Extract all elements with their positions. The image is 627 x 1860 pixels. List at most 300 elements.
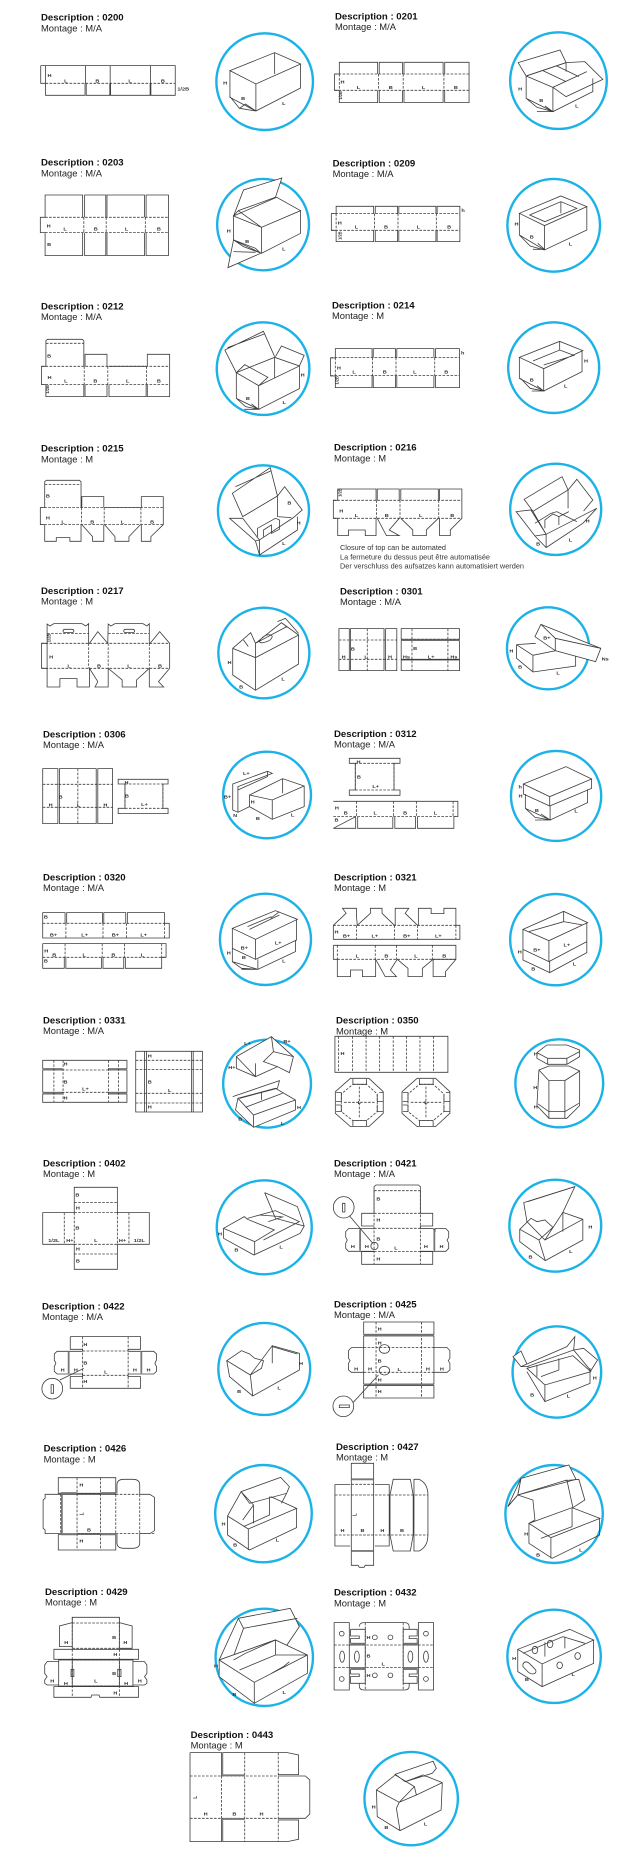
flat pattern 0312: H — [335, 806, 339, 811]
icon: circle box 0429: L — [283, 1690, 286, 1696]
flat pattern 0209 — [331, 206, 465, 242]
flat pattern 0306: H — [49, 803, 53, 808]
heading 0426: Montage : M — [44, 1453, 96, 1464]
icon: circle box 0214 — [508, 322, 599, 413]
icon: circle box 0217: H — [228, 660, 232, 666]
heading 0422: Montage : M/A — [42, 1311, 104, 1322]
flat pattern 0402: B — [75, 1226, 80, 1231]
flat pattern 0425: L — [397, 1367, 401, 1373]
heading 0201 — [335, 11, 418, 32]
flat pattern 0320: L — [83, 953, 86, 958]
icon: circle box 0421: H — [588, 1225, 593, 1230]
panel: box 0321 — [333, 872, 601, 985]
panel: box 0312 — [333, 729, 601, 841]
flat pattern 0217 — [42, 624, 170, 687]
heading 0443: Description : 0443 — [191, 1730, 273, 1741]
flat pattern 0209: 1/2B — [337, 231, 342, 240]
flat pattern 0209: h — [461, 208, 465, 214]
flat pattern 0350: L — [358, 1100, 361, 1106]
icon: circle box 0331: B+ — [283, 1039, 291, 1045]
flat pattern 0216: L — [355, 513, 358, 519]
icon: circle box 0429 — [214, 1608, 313, 1706]
heading 0306: Montage : M/A — [43, 739, 105, 750]
icon: circle box 0350: H — [534, 1052, 538, 1057]
heading 0217 — [41, 586, 124, 607]
flat pattern 0214: 1/2B — [334, 376, 340, 385]
icon: circle box 0425: H — [593, 1376, 597, 1381]
icon: circle box 0443: B — [384, 1825, 389, 1831]
flat pattern 0350: H — [341, 1051, 345, 1057]
flat pattern 0212 — [42, 339, 170, 397]
icon: circle box 0443 — [364, 1752, 458, 1845]
heading 0443: Montage : M — [191, 1740, 243, 1751]
flat pattern 0201: B — [454, 85, 458, 91]
flat pattern 0209: L — [417, 225, 420, 230]
flat pattern 0320: B — [111, 953, 116, 958]
heading 0212: Description : 0212 — [41, 301, 124, 312]
heading 0203: Description : 0203 — [41, 158, 124, 169]
flat pattern 0429: H — [138, 1679, 142, 1684]
heading 0203 — [41, 158, 124, 178]
flat pattern 0421: H — [365, 1244, 369, 1250]
icon: circle box 0215 — [218, 465, 309, 556]
icon: circle box 0306: N — [233, 813, 237, 819]
flat pattern 0200: B — [95, 79, 100, 84]
flat pattern 0426: H — [79, 1483, 84, 1488]
flat pattern 0203: H — [47, 224, 51, 229]
flat pattern 0209: L — [355, 225, 358, 230]
flat pattern 0215: H — [46, 516, 50, 521]
heading 0200: Description : 0200 — [41, 13, 124, 24]
icon: circle box 0432: L — [572, 1672, 575, 1678]
icon: circle box 0312: B — [535, 808, 539, 814]
panel: box 0201 — [335, 11, 607, 129]
flat pattern 0421: L — [394, 1246, 398, 1251]
flat pattern 0312: B — [357, 775, 361, 780]
panel: box 0212 — [41, 301, 309, 415]
flat pattern 0443: L — [192, 1796, 199, 1799]
icon: circle box 0321: B — [531, 967, 536, 972]
flat pattern 0203: L — [63, 227, 67, 232]
flat pattern 0320: B+ — [112, 933, 119, 938]
panel: box 0422 — [42, 1301, 310, 1415]
icon: circle box 0212: B — [246, 396, 250, 402]
flat pattern 0200: L — [128, 79, 132, 84]
flat pattern 0402: B — [76, 1259, 80, 1264]
heading 0214 — [332, 300, 415, 321]
heading 0200: Montage : M/A — [41, 22, 103, 33]
heading 0214: Montage : M — [332, 310, 384, 321]
icon: circle box 0200: L — [282, 101, 286, 107]
icon: circle box 0203 — [217, 178, 309, 270]
flat pattern 0320: B — [44, 915, 48, 920]
flat pattern 0427: B — [400, 1528, 404, 1534]
flat pattern 0421: H — [376, 1257, 381, 1262]
icon: circle box 0312: L — [574, 809, 578, 814]
heading 0421: Montage : M/A — [334, 1168, 396, 1179]
panel: box 0215 — [40, 444, 309, 556]
flat pattern 0212: B — [47, 354, 51, 359]
heading 0201: Montage : M/A — [335, 21, 397, 32]
heading 0306: Description : 0306 — [43, 729, 126, 740]
flat pattern 0422: H — [83, 1342, 88, 1348]
flat pattern 0217: L — [127, 664, 131, 669]
flat pattern 0301: Hs — [403, 655, 410, 660]
flat pattern 0443: B — [232, 1812, 237, 1817]
icon: circle box 0331: H+ — [228, 1065, 236, 1071]
flat pattern 0425: H — [378, 1389, 382, 1395]
flat pattern 0301: L — [364, 655, 368, 660]
heading 0432: Description : 0432 — [334, 1588, 417, 1599]
flat pattern 0201: H — [341, 80, 345, 85]
icon: circle box 0331: B — [238, 1117, 243, 1122]
icon: circle box 0306: L — [291, 813, 294, 818]
flat pattern 0321: B — [442, 954, 447, 959]
flat pattern 0432: H — [366, 1673, 371, 1679]
panel: box 0426 — [43, 1444, 312, 1562]
flat pattern 0321: H — [335, 930, 339, 935]
flat pattern 0321: L+ — [435, 934, 442, 939]
flat pattern 0306: H — [125, 780, 129, 786]
flat pattern 0432: B — [366, 1654, 371, 1659]
flat pattern 0312: L — [374, 811, 377, 816]
flat pattern 0321 — [333, 908, 460, 977]
panel: box 0301 — [339, 586, 609, 689]
panel: box 0320 — [43, 872, 311, 985]
flat pattern 0425: H — [354, 1367, 358, 1372]
flat pattern 0212: B — [157, 379, 161, 384]
heading 0432 — [334, 1588, 417, 1608]
icon: circle box 0426: H — [222, 1522, 226, 1527]
icon: circle box 0200 — [216, 33, 313, 130]
flat pattern 0402: H+ — [119, 1238, 126, 1244]
flat pattern 0443: H — [204, 1812, 208, 1817]
icon: circle box 0443: L — [424, 1822, 427, 1827]
icon: circle box 0200: H — [223, 81, 227, 86]
flat pattern 0215: B — [46, 494, 50, 499]
icon: circle box 0320: B+ — [241, 946, 248, 951]
heading 0331: Description : 0331 — [43, 1015, 126, 1026]
panel: box 0203 — [40, 158, 309, 270]
flat pattern 0425: H — [378, 1378, 382, 1383]
panel: box 0209 — [331, 158, 600, 272]
heading 0217: Description : 0217 — [41, 586, 124, 597]
heading 0425 — [334, 1299, 417, 1320]
icon: circle box 0301: Ns — [602, 657, 609, 662]
panel: box 0200 — [41, 13, 313, 130]
note: automation text 0216: Der verschluss des aufsatzes kann automatisiert werden — [340, 562, 524, 570]
panel: box 0331 — [43, 1015, 311, 1128]
icon: circle box 0301: L — [556, 671, 560, 676]
flat pattern 0425: H — [426, 1367, 430, 1372]
heading 0301: Description : 0301 — [340, 586, 423, 597]
heading 0427: Description : 0427 — [336, 1442, 419, 1453]
panel: box 0217 — [41, 586, 309, 698]
icon: circle box 0306: B+ — [224, 795, 231, 800]
icon: circle box 0217: B — [239, 685, 243, 690]
flat pattern 0212: B — [93, 379, 98, 384]
flat pattern 0203: B — [157, 227, 161, 232]
icon: circle box 0426: B — [233, 1543, 237, 1548]
icon: circle box 0201: B — [539, 98, 544, 104]
panel: box 0214 — [331, 300, 599, 413]
icon: circle box 0427 — [505, 1465, 603, 1563]
flat pattern 0429: H — [64, 1640, 69, 1646]
heading 0425: Montage : M/A — [334, 1309, 396, 1320]
panel: box 0443 — [190, 1730, 458, 1845]
icon: circle box 0331: L+ — [244, 1041, 251, 1047]
flat pattern 0216: H — [339, 509, 344, 514]
heading 0312 — [334, 729, 417, 750]
flat pattern 0427: L — [352, 1513, 359, 1516]
heading 0203: Montage : M/A — [41, 167, 103, 178]
icon: circle box 0320 — [220, 894, 311, 985]
flat pattern 0321: L — [356, 954, 359, 959]
flat pattern 0321: L — [414, 954, 418, 959]
flat pattern 0301: B — [351, 647, 355, 652]
heading 0421 — [334, 1158, 417, 1179]
icon: circle box 0216: B — [536, 542, 540, 547]
flat pattern 0312 — [333, 758, 458, 828]
flat pattern 0421 — [333, 1185, 449, 1264]
heading 0429: Description : 0429 — [45, 1587, 128, 1598]
icon: circle box 0203: H — [227, 229, 231, 234]
heading 0331 — [43, 1015, 126, 1036]
flat pattern 0425: H — [378, 1327, 382, 1332]
icon: circle box 0331: L — [281, 1121, 284, 1127]
flat pattern 0301 — [339, 629, 459, 671]
flat pattern 0402: 1/2L — [134, 1238, 145, 1244]
icon: circle box 0212: H — [301, 373, 305, 378]
icon: circle box 0301 — [507, 607, 609, 689]
flat pattern 0214: L — [352, 370, 356, 375]
flat pattern 0203: L — [125, 227, 128, 232]
flat pattern 0209: B — [384, 225, 388, 230]
heading 0306 — [43, 729, 126, 750]
icon: circle box 0429: H — [214, 1664, 218, 1669]
icon: circle box 0301: B+ — [543, 636, 551, 641]
icon: circle box 0312: H — [519, 794, 523, 799]
flat pattern 0214: L — [413, 370, 416, 375]
icon: circle box 0214: L — [564, 384, 567, 389]
icon: circle box 0321 — [510, 894, 601, 985]
flat pattern 0312: B — [403, 811, 408, 816]
note: automation text 0216 — [340, 543, 524, 570]
flat pattern 0301: B — [413, 646, 418, 652]
icon: circle box 0215: L — [282, 541, 286, 547]
flat pattern 0201: B — [389, 85, 393, 91]
icon: circle box 0421 — [509, 1180, 601, 1272]
flat pattern 0422 — [42, 1337, 156, 1399]
flat pattern 0306: B — [125, 794, 129, 799]
flat pattern 0402: L — [94, 1238, 98, 1244]
icon: circle box 0209: L — [569, 242, 572, 247]
flat pattern 0301: H — [342, 655, 346, 660]
icon: circle box 0427: L — [579, 1548, 583, 1553]
flat pattern 0429: H — [124, 1681, 128, 1687]
heading 0209: Description : 0209 — [333, 158, 415, 169]
flat pattern 0426 — [43, 1478, 154, 1550]
flat pattern 0421: H — [376, 1218, 381, 1223]
heading 0212: Montage : M/A — [41, 311, 103, 322]
flat pattern 0212: 1/2B — [45, 385, 50, 394]
heading 0301: Montage : M/A — [340, 596, 402, 607]
icon: circle box 0427: B — [536, 1553, 540, 1558]
flat pattern 0212: H — [47, 375, 52, 381]
flat pattern 0427: B — [360, 1528, 365, 1534]
flat pattern 0214: H — [337, 366, 341, 371]
heading 0350 — [336, 1016, 419, 1036]
icon: circle box 0320: H — [227, 951, 231, 956]
flat pattern 0429 — [45, 1617, 147, 1697]
flat pattern 0201: L — [422, 85, 425, 91]
flat pattern 0214: B — [444, 370, 449, 375]
icon: circle box 0402 — [217, 1180, 312, 1274]
heading 0216 — [334, 443, 417, 463]
heading 0426 — [44, 1444, 126, 1464]
flat pattern 0429: B — [112, 1635, 117, 1641]
flat pattern 0217: B — [158, 664, 162, 669]
icon: circle box 0201 — [510, 32, 607, 129]
icon: circle box 0422: H — [299, 1361, 303, 1367]
flat pattern 0321: B+ — [343, 934, 350, 939]
flat pattern 0306 — [43, 769, 168, 824]
icon: circle box 0312: h — [518, 785, 522, 790]
flat pattern 0429: B — [112, 1671, 117, 1677]
flat pattern 0209: H — [338, 221, 342, 226]
flat pattern 0215 — [40, 480, 163, 541]
icon: circle box 0429: B — [232, 1692, 237, 1698]
icon: circle box 0306: H — [251, 800, 255, 805]
heading 0426: Description : 0426 — [44, 1444, 126, 1455]
icon: circle box 0214: H — [584, 359, 588, 364]
flat pattern 0429: L — [94, 1679, 98, 1684]
flat pattern 0425: B — [378, 1359, 382, 1364]
flat pattern 0422: H — [61, 1368, 65, 1373]
icon: circle box 0203: L — [282, 247, 286, 252]
icon: circle box 0306 — [223, 752, 311, 838]
flat pattern 0321: B+ — [403, 934, 410, 939]
icon: circle box 0350 — [515, 1039, 603, 1127]
flat pattern 0427 — [335, 1463, 428, 1567]
icon: circle box 0402: L — [279, 1245, 283, 1250]
heading 0321 — [334, 872, 417, 893]
icon: circle box 0402: H — [218, 1232, 222, 1237]
heading 0421: Description : 0421 — [334, 1158, 417, 1169]
flat pattern 0216: B — [450, 513, 455, 519]
flat pattern 0320: L — [141, 953, 144, 958]
icon: circle box 0217 — [218, 608, 309, 698]
flat pattern 0429: H — [50, 1679, 55, 1684]
icon: circle box 0306: B — [256, 816, 260, 822]
icon: circle box 0421: L — [569, 1249, 573, 1255]
flat pattern 0422: H — [133, 1368, 137, 1373]
heading 0214: Description : 0214 — [332, 300, 415, 311]
flat pattern 0306: B — [59, 795, 63, 800]
icon: circle box 0320: L+ — [275, 941, 282, 946]
heading 0212 — [41, 301, 124, 322]
flat pattern 0427: H — [341, 1528, 345, 1534]
flat pattern 0422: H — [74, 1368, 78, 1373]
flat pattern 0331: L+ — [82, 1087, 89, 1092]
icon: circle box 0301: H — [509, 649, 514, 654]
flat pattern 0306: L — [77, 803, 80, 808]
icon: circle box 0426 — [215, 1465, 312, 1562]
flat pattern 0200: 1/2B — [177, 87, 189, 92]
flat pattern 0321: L+ — [372, 934, 378, 939]
heading 0215 — [41, 444, 124, 464]
panel: box 0216 — [333, 443, 601, 570]
flat pattern 0350 — [335, 1036, 450, 1127]
heading 0429: Montage : M — [45, 1597, 97, 1608]
flat pattern 0331: L — [168, 1088, 171, 1094]
flat pattern 0216: L — [419, 513, 422, 519]
flat pattern 0320 — [43, 913, 169, 968]
icon: circle box 0425: B — [530, 1393, 534, 1398]
icon: circle box 0212: L — [283, 400, 286, 406]
icon: circle box 0200: B — [241, 96, 245, 102]
heading 0217: Montage : M — [41, 596, 93, 607]
flat pattern 0402: B — [75, 1193, 80, 1198]
flat pattern 0212: L — [64, 379, 68, 384]
flat pattern 0203 — [40, 195, 168, 256]
flat pattern 0306: L+ — [141, 802, 148, 808]
flat pattern 0301: H — [388, 655, 392, 660]
flat pattern 0426: H — [79, 1539, 84, 1544]
flat pattern 0421: H — [424, 1244, 428, 1250]
icon: circle box 0422: L — [277, 1386, 281, 1391]
flat pattern 0201 — [335, 62, 469, 103]
flat pattern 0429: H — [113, 1691, 118, 1696]
heading 0429 — [45, 1587, 128, 1608]
flat pattern 0402 — [43, 1187, 149, 1269]
panel: box 0306 — [43, 729, 311, 838]
flat pattern 0201: L — [357, 85, 360, 91]
flat pattern 0312: H — [356, 760, 361, 765]
flat pattern 0350: L — [424, 1100, 428, 1106]
flat pattern 0320: B — [52, 953, 57, 958]
flat pattern 0421: H — [351, 1244, 355, 1250]
flat pattern 0331: B — [148, 1080, 152, 1085]
note: automation text 0216: Closure of top can be automated — [340, 543, 446, 552]
flat pattern 0200: H — [47, 73, 52, 79]
heading 0201: Description : 0201 — [335, 11, 418, 22]
heading 0312: Description : 0312 — [334, 729, 417, 740]
flat pattern 0425 — [333, 1322, 450, 1417]
panel: box 0402 — [43, 1158, 312, 1274]
icon: circle box 0214: B — [530, 378, 534, 383]
flat pattern 0331: H — [148, 1054, 152, 1059]
flat pattern 0421: B — [376, 1197, 381, 1202]
icon: circle box 0321: L — [573, 962, 576, 967]
flat pattern 0216 — [333, 488, 462, 536]
flat pattern 0331: B — [63, 1080, 68, 1085]
flat pattern 0312: L — [434, 811, 437, 816]
flat pattern 0306: H — [103, 803, 108, 808]
panel: box 0425 — [333, 1299, 601, 1418]
flat pattern 0443 — [190, 1753, 310, 1842]
panel: box 0350 — [335, 1016, 603, 1127]
icon: circle box 0425 — [513, 1326, 601, 1418]
flat pattern 0422: B — [83, 1361, 88, 1366]
flat pattern 0217: 1/2B — [46, 634, 52, 642]
flat pattern 0215: B — [150, 520, 154, 525]
icon: circle box 0201: H — [518, 87, 522, 92]
heading 0320 — [43, 872, 126, 893]
icon: circle box 0321: L+ — [564, 943, 570, 948]
heading 0350: Montage : M — [336, 1025, 388, 1036]
icon: circle box 0209: B — [530, 235, 534, 240]
